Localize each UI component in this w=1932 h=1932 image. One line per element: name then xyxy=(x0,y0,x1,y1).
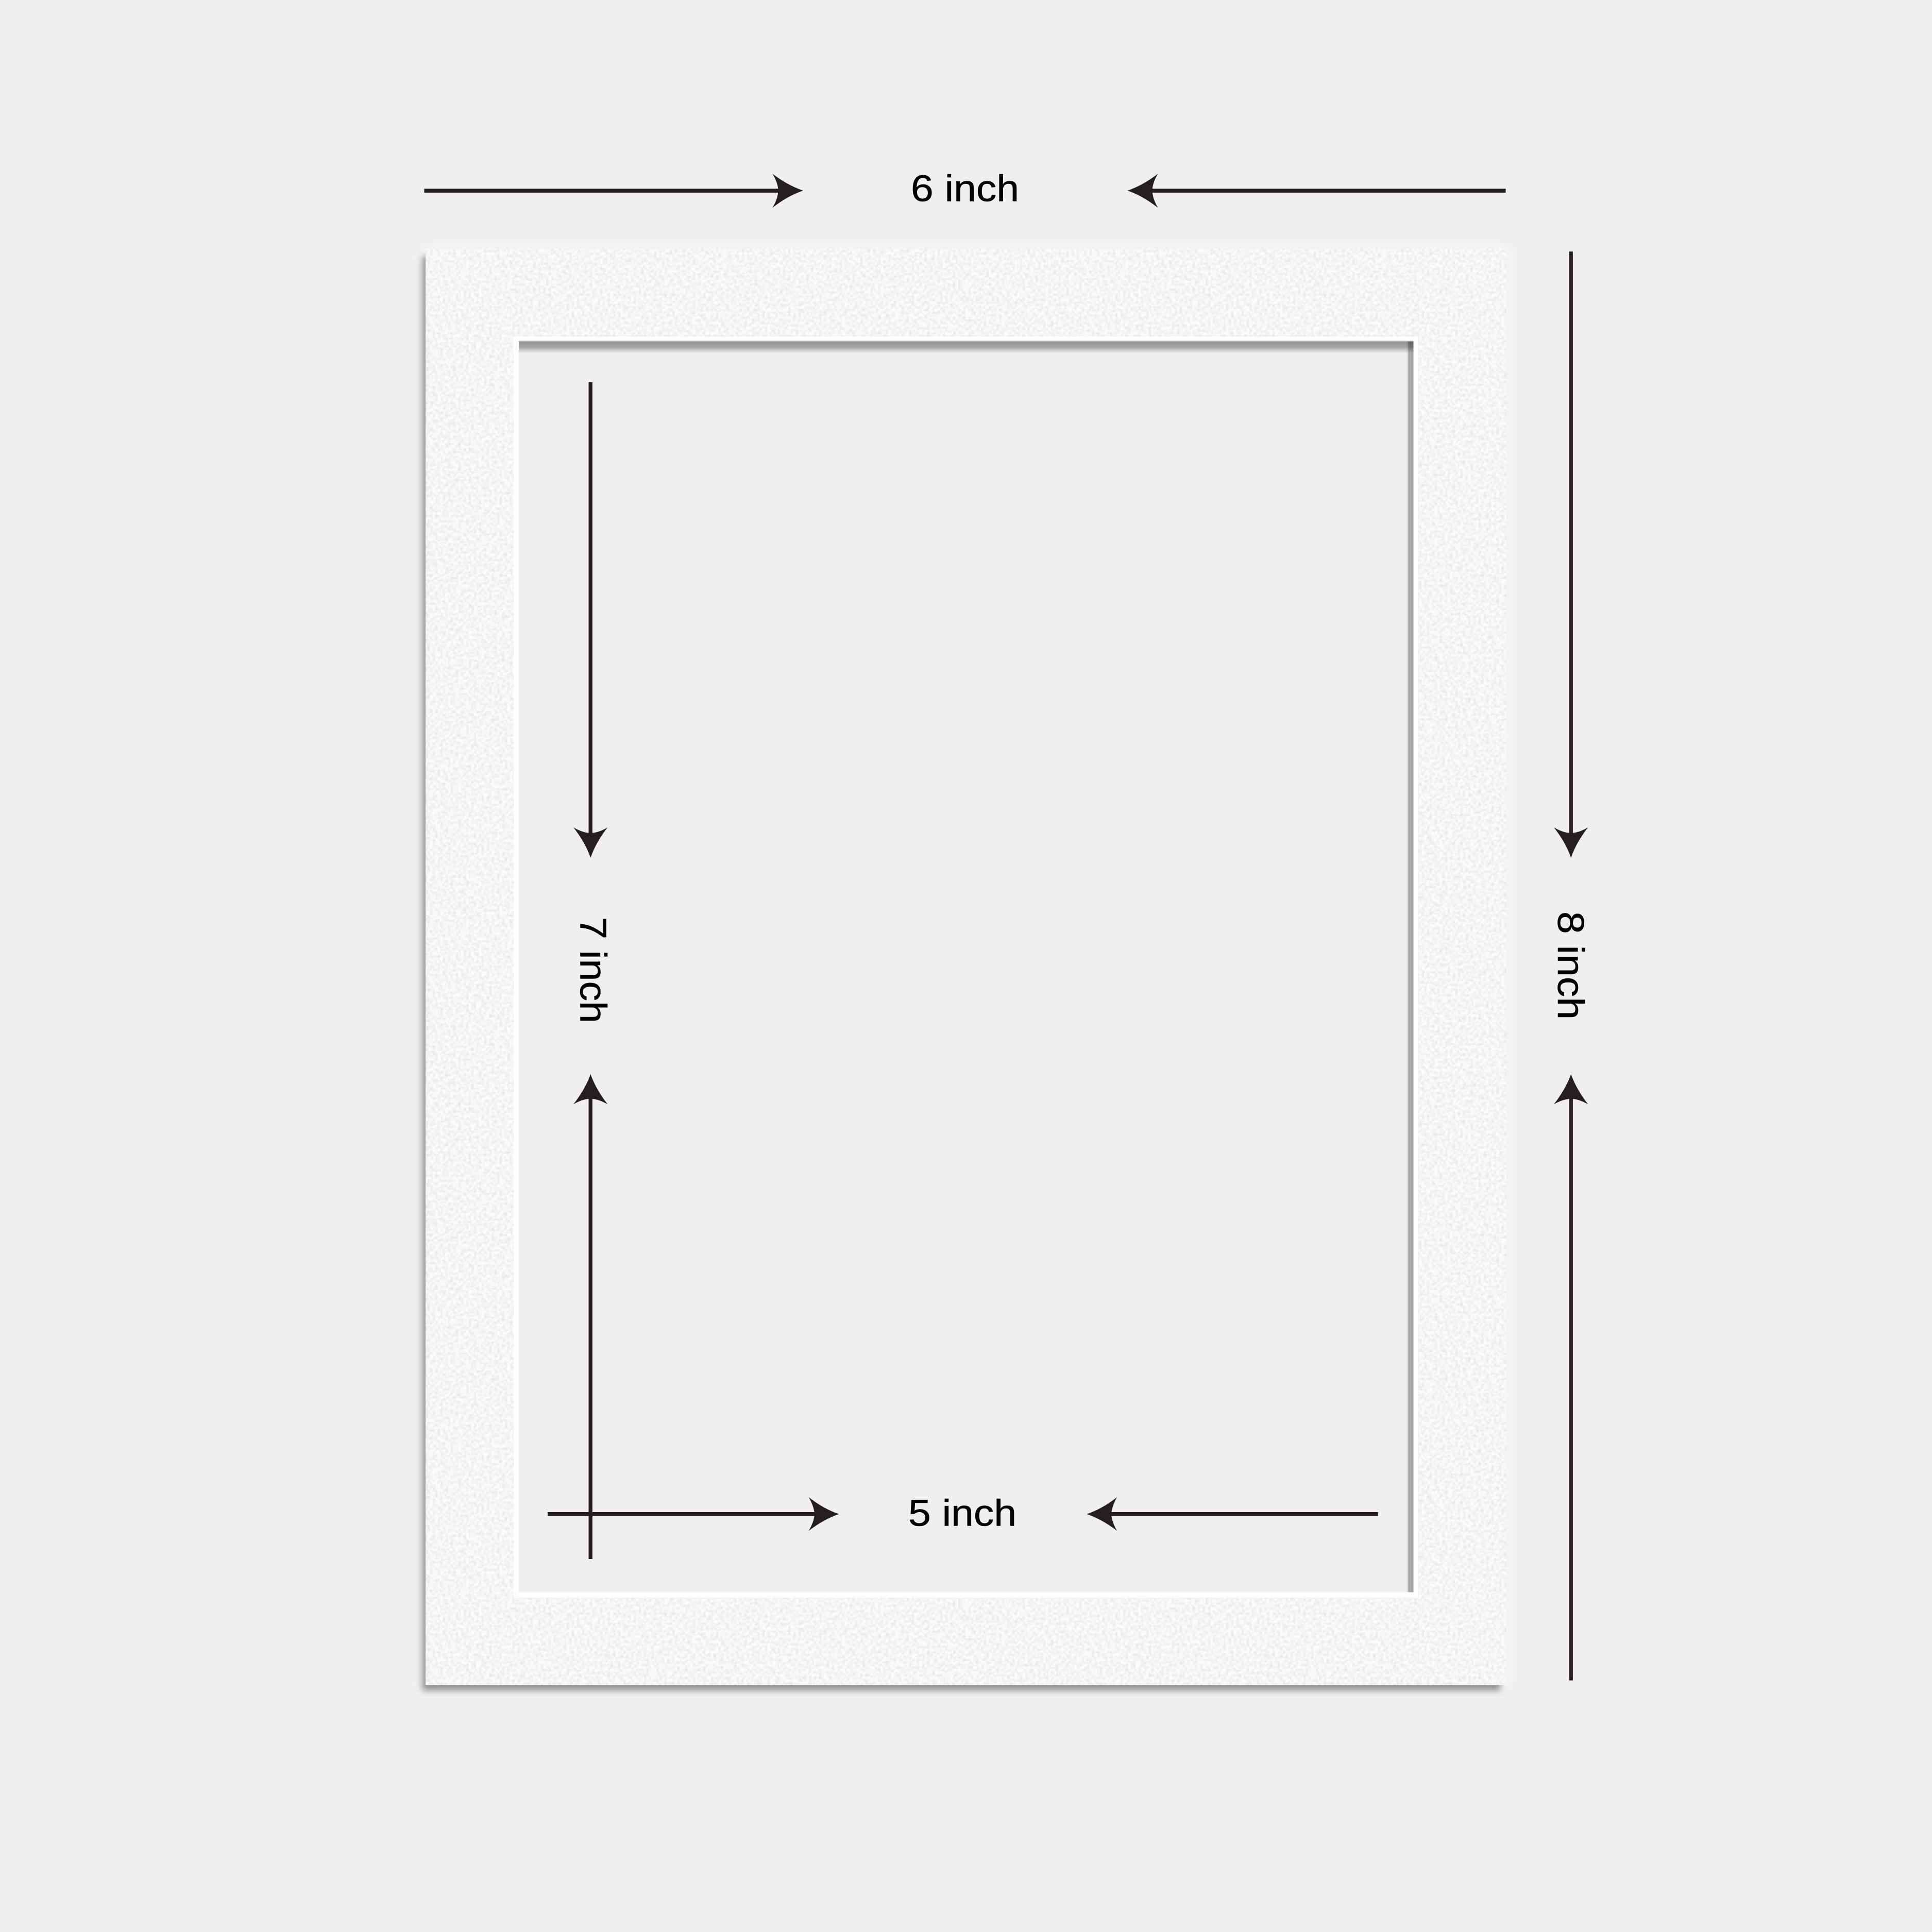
mat faint outer glow xyxy=(423,245,1512,1686)
opening top inner shadow xyxy=(519,341,1414,353)
arrow: opening height, lower half xyxy=(573,1074,607,1559)
panel: photo mat xyxy=(422,245,1512,1690)
arrow: outer height, upper half xyxy=(1554,251,1588,858)
arrow: outer height, lower half xyxy=(1554,1074,1588,1681)
mat drop shadow xyxy=(422,257,1500,1690)
label: 8 inch: 8 inch xyxy=(1550,911,1591,1020)
arrow: top width, right half xyxy=(1127,174,1506,208)
white bevel around opening xyxy=(514,336,1418,1598)
arrow: top width, left half xyxy=(424,174,803,208)
opening xyxy=(519,340,1414,1592)
label: 7 inch: 7 inch xyxy=(572,917,614,1023)
label: 5 inch: 5 inch xyxy=(908,1493,1016,1534)
arrow: opening width, left half xyxy=(548,1497,839,1531)
arrow: opening width, right half xyxy=(1087,1497,1378,1531)
label: 6 inch: 6 inch xyxy=(911,168,1019,210)
arrow: opening height, upper half xyxy=(573,382,607,858)
mat board with grain xyxy=(426,249,1506,1685)
opening right inner shadow xyxy=(1406,341,1414,1592)
